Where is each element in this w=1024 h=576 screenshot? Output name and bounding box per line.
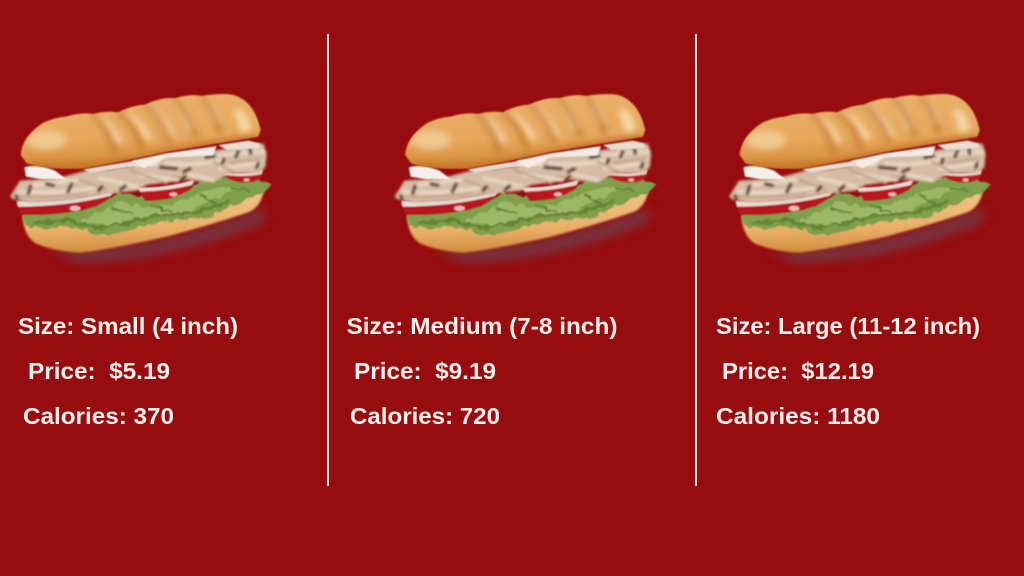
divider: right	[695, 34, 697, 486]
icon: large sandwich	[729, 94, 991, 262]
panel: small sandwich	[10, 94, 272, 429]
text: large size: Size: Large (11-12 inch)	[716, 313, 980, 339]
divider: left	[327, 34, 329, 486]
icon: medium sandwich	[394, 94, 656, 262]
text: large calories: Calories: 1180	[716, 403, 880, 429]
text: medium size: Size: Medium (7-8 inch)	[346, 313, 618, 339]
panel: medium sandwich	[346, 94, 656, 429]
icon: small sandwich	[10, 94, 272, 262]
text: small calories: Calories: 370	[23, 403, 174, 429]
panel: large sandwich	[716, 94, 991, 429]
text: medium price: Price: $9.19	[354, 358, 496, 384]
text: medium calories: Calories: 720	[350, 403, 500, 429]
text: small size: Size: Small (4 inch)	[18, 313, 238, 339]
text: large price: Price: $12.19	[722, 358, 874, 384]
text: small price: Price: $5.19	[28, 358, 170, 384]
